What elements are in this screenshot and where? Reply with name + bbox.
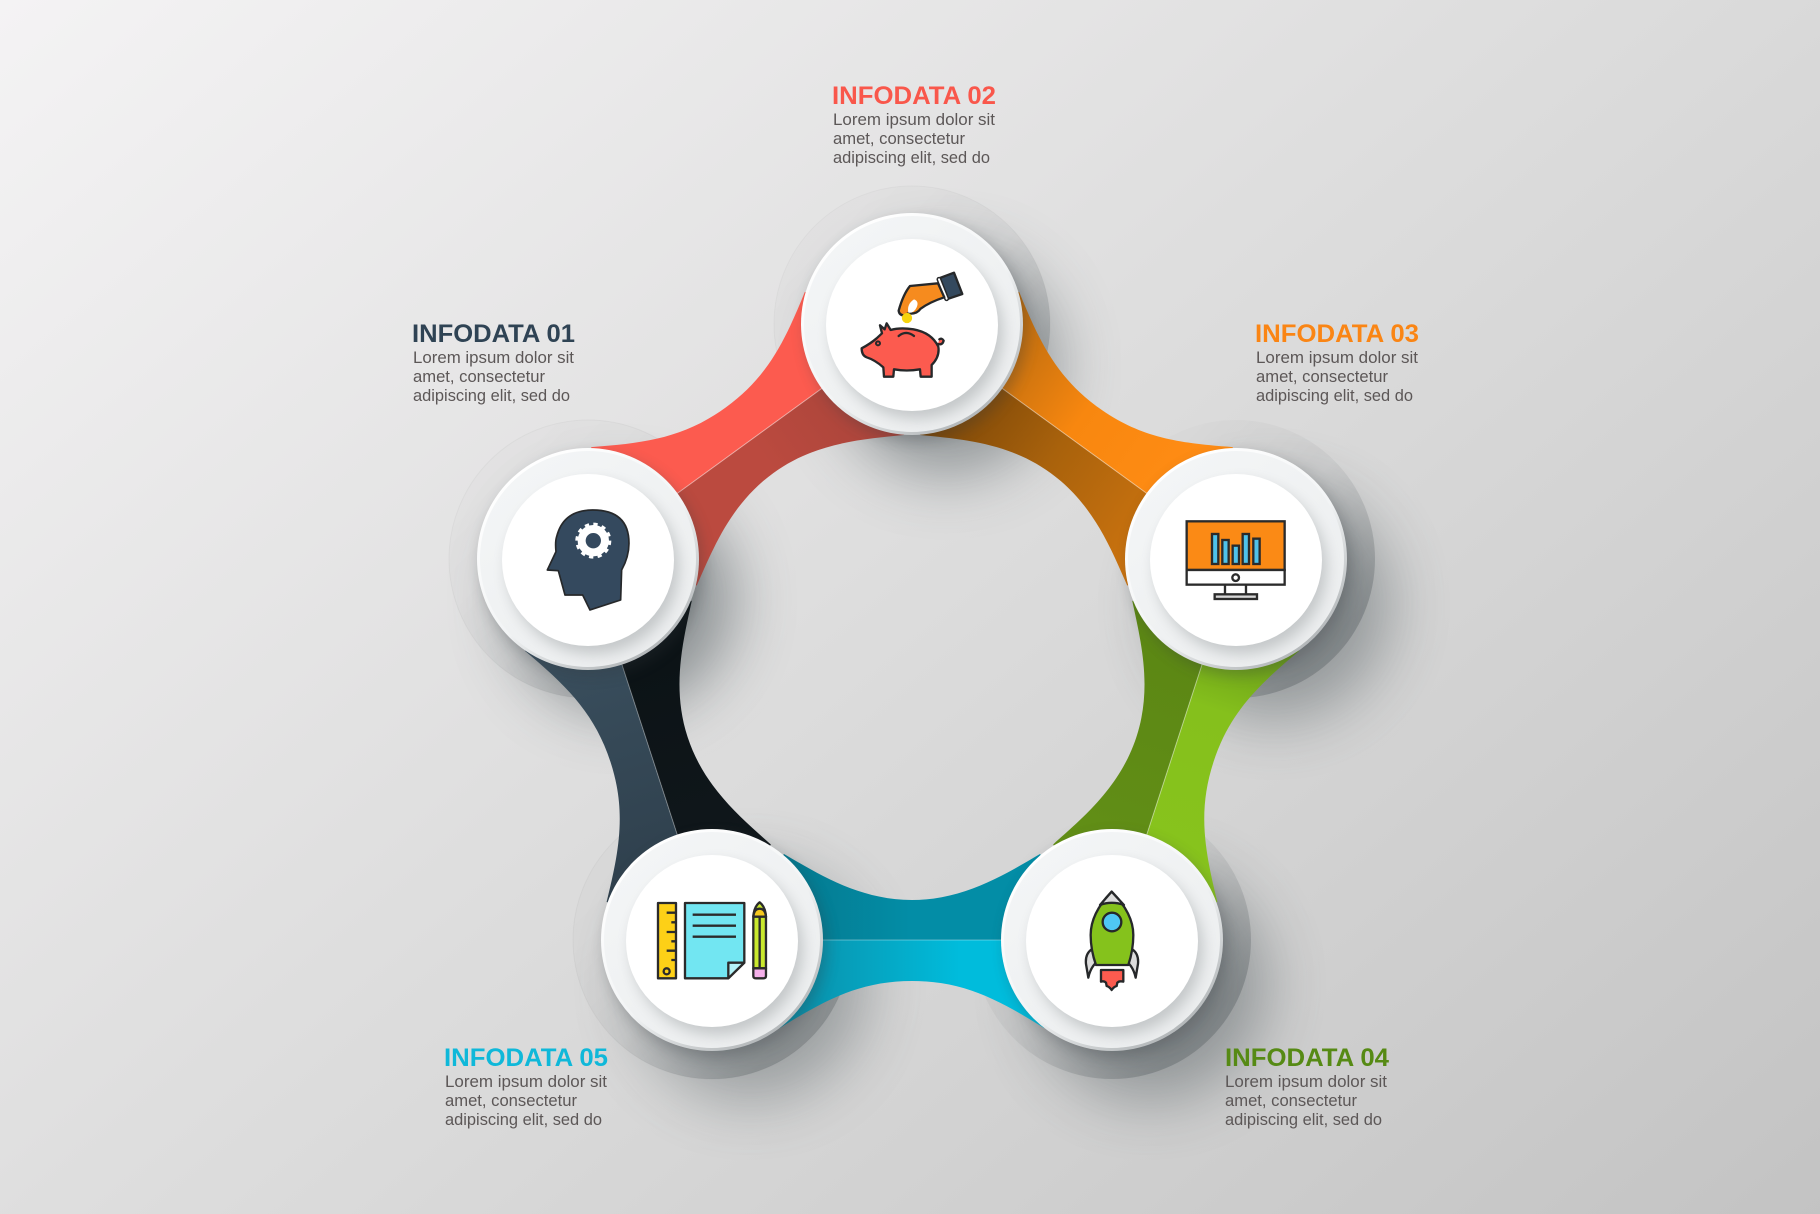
ribbon: orange (03 to 02) [862,252,1288,628]
label: infodata 05 [444,1044,608,1129]
label: infodata 04: INFODATA 04 [1225,1044,1389,1072]
icon: ruler, note and pencil [658,902,766,978]
label: infodata 02 [832,82,996,167]
label: infodata 02: INFODATA 02 [832,82,996,110]
label: infodata 04: adipiscing elit, sed do [1225,1110,1382,1129]
ribbon: teal (05 to 04) [712,854,1112,1028]
disc: left (01) [477,448,703,676]
label: infodata 01: INFODATA 01 [412,320,575,348]
icon: head with gear [547,510,629,610]
icon: rocket [1086,892,1138,990]
label: infodata 02: Lorem ipsum dolor sit [833,110,995,129]
label: infodata 03: adipiscing elit, sed do [1256,386,1413,405]
halo rings behind discs [449,186,1375,1079]
label: infodata 05: Lorem ipsum dolor sit [445,1072,607,1091]
label: infodata 05: INFODATA 05 [444,1044,608,1072]
label: infodata 03: INFODATA 03 [1255,320,1419,348]
label: infodata 02: amet, consectetur [833,129,965,148]
disc: top (02) [801,213,1027,441]
disc: bottom right (04) [1001,829,1227,1057]
label: infodata 01 [412,320,575,405]
label: infodata 04 [1225,1044,1389,1129]
label: infodata 01: Lorem ipsum dolor sit [413,348,574,367]
cast shadows of the discs [510,252,1390,1100]
label: infodata 04: Lorem ipsum dolor sit [1225,1072,1387,1091]
label: infodata 05: amet, consectetur [445,1091,577,1110]
label: infodata 03 [1255,320,1419,405]
disc: right (03) [1125,448,1351,676]
label: infodata 01: amet, consectetur [413,367,545,386]
label: infodata 04: amet, consectetur [1225,1091,1357,1110]
ribbon: navy (01 to 05) [504,533,793,967]
icon: hand dropping a coin into a piggy bank [862,273,962,377]
label: infodata 03: amet, consectetur [1256,367,1388,386]
label: infodata 05: adipiscing elit, sed do [445,1110,602,1129]
disc: bottom left (05) [601,829,827,1057]
ribbon: red (02 to 01) [536,252,962,628]
label: infodata 02: adipiscing elit, sed do [833,148,990,167]
label: infodata 03: Lorem ipsum dolor sit [1256,348,1418,367]
label: infodata 01: adipiscing elit, sed do [413,386,570,405]
icon: monitor with bar chart [1187,521,1285,599]
ribbon: green (04 to 03) [1031,533,1320,967]
